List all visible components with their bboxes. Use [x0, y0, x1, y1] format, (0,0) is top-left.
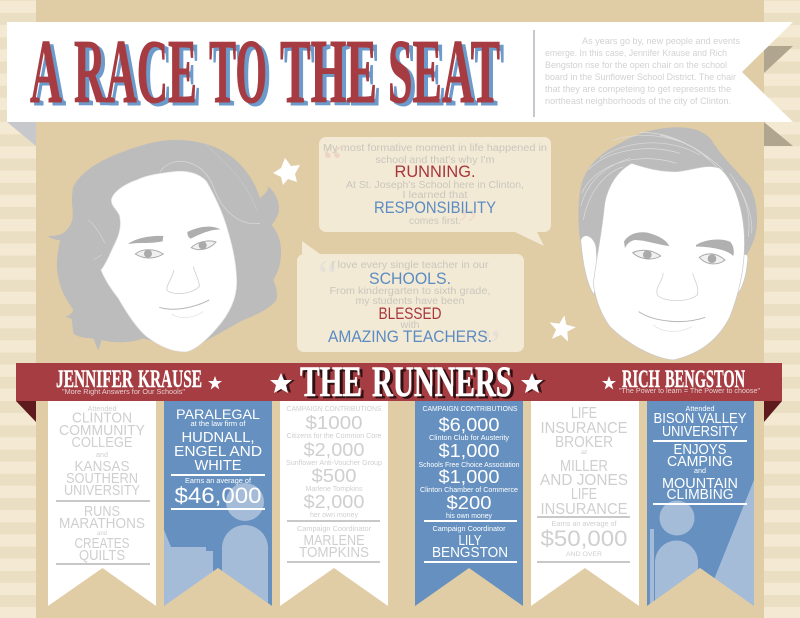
title: RACE — [74, 21, 197, 122]
column 3: Krause campaign contributions: Campaign Coordinator — [297, 526, 372, 533]
column 3: Krause campaign contributions: $1000 — [306, 412, 362, 433]
column 2: Krause occupation: HUDNALL, — [182, 429, 254, 446]
speech bubble: Krause quote: RESPONSIBILITY — [374, 198, 496, 217]
column 6: Bengston education and hobbies: CAMPING — [667, 454, 733, 470]
speech bubble: Krause quote: ” — [458, 200, 478, 249]
column 5: Bengston occupation: INSURANCE — [540, 420, 628, 437]
speech bubble: Krause quote — [319, 137, 551, 249]
column 6: Bengston education and hobbies — [647, 401, 754, 618]
column 2: Krause occupation: PARALEGAL — [176, 406, 260, 422]
column 3: Krause campaign contributions: $500 — [312, 465, 356, 486]
speech bubble: Bengston quote: AMAZING TEACHERS. — [328, 327, 492, 346]
heading: The Runners: THE — [303, 361, 365, 408]
column 2: Krause occupation: at the law firm of — [190, 421, 246, 428]
column 1: Krause education — [48, 401, 156, 606]
column 6: Bengston education and hobbies: CLIMBING — [666, 487, 734, 503]
heading: The Runners: RUNNERS — [375, 361, 515, 408]
column 5: Bengston occupation: AND OVER — [566, 551, 602, 558]
intro text block: emerge. In this case, Jennifer Krause and Rich — [545, 48, 727, 59]
infographic: SEAT — [392, 24, 504, 125]
column 4: Bengston campaign contributions: Clinton Club for Austerity — [429, 435, 510, 442]
title: THE — [280, 21, 377, 122]
column 1: Krause education: and — [97, 531, 107, 537]
icon: climber silhouette — [647, 480, 754, 618]
speech bubble: Krause quote: “ — [323, 137, 343, 186]
intro text block: that they are competeing to get represents the — [545, 84, 731, 95]
portrait: Rich Bengston — [578, 127, 757, 360]
column 5: Bengston occupation: LIFE — [571, 486, 597, 503]
column 6: Bengston education and hobbies: and — [694, 468, 706, 475]
column 4: Bengston campaign contributions: CAMPAIGN CONTRIBUTIONS — [422, 406, 518, 413]
title: RACE — [78, 24, 201, 125]
column 3: Krause campaign contributions: $2,000 — [304, 491, 364, 512]
name: Jennifer Krause with slogan: "More Right Answers for Our Schools" — [62, 389, 186, 396]
intro text block: northeast neighborhoods of the city of Clinton. — [545, 96, 731, 107]
column 2: Krause occupation: Earns an average of — [185, 478, 251, 485]
name: Jennifer Krause with slogan: KRAUSE — [138, 366, 202, 393]
column 4: Bengston campaign contributions: BENGSTON — [432, 545, 508, 561]
star — [273, 158, 300, 185]
column 1: Krause education: CREATES — [74, 536, 130, 552]
title: TO — [213, 24, 271, 125]
column 6: Bengston education and hobbies: MOUNTAIN — [662, 476, 738, 492]
column 4: Bengston campaign contributions: $1,000 — [438, 440, 500, 461]
column 5: Bengston occupation: INSURANCE — [540, 501, 628, 518]
column 4: Bengston campaign contributions — [415, 401, 523, 606]
column 5: Bengston occupation: LIFE — [571, 405, 597, 422]
speech bubble: Bengston quote: BLESSED — [378, 304, 442, 323]
column 6: Bengston education and hobbies: ENJOYS — [674, 442, 726, 458]
column 3: Krause campaign contributions — [280, 401, 388, 606]
heading: The Runners: RUNNERS — [372, 359, 512, 406]
speech bubble: Krause quote: At St. Joseph's School here in Clinton, — [346, 179, 524, 191]
column 1: Krause education: SOUTHERN — [66, 471, 138, 487]
column 5: Bengston occupation — [531, 401, 639, 606]
intro text block: board in the Sunflower School District. The chair — [545, 72, 736, 83]
runners ribbon — [16, 363, 782, 422]
title banner — [7, 22, 793, 146]
title — [30, 21, 504, 125]
speech bubble: Bengston quote: with — [399, 319, 420, 331]
column 1: Krause education: CLINTON — [72, 410, 132, 426]
column 4: Bengston campaign contributions: $1,000 — [438, 466, 500, 487]
name: Rich Bengston with slogan: BENGSTON — [665, 366, 745, 393]
name: Rich Bengston with slogan: RICH — [622, 366, 660, 393]
title: TO — [209, 21, 267, 122]
speech bubble: Bengston quote: my students have been — [356, 295, 465, 307]
column 3: Krause campaign contributions: Marlene Tompkins — [306, 486, 363, 493]
portrait: Jennifer Krause — [48, 140, 281, 352]
title: A — [34, 24, 66, 125]
intro text block — [545, 36, 740, 107]
speech bubble: Bengston quote: SCHOOLS. — [369, 269, 451, 288]
speech bubble: Krause quote: My most formative moment in life happened in — [323, 142, 547, 154]
column 5: Bengston occupation: $50,000 — [540, 526, 628, 551]
star — [550, 315, 576, 342]
column 3: Krause campaign contributions: CAMPAIGN CONTRIBUTIONS — [286, 406, 382, 413]
column 5: Bengston occupation: BROKER — [555, 434, 613, 451]
speech bubble: Krause quote: school and that's why I'm — [376, 154, 495, 166]
column 1: Krause education: QUILTS — [79, 548, 125, 564]
column 1: Krause education: COMMUNITY — [59, 423, 145, 439]
speech bubble: Krause quote: RUNNING. — [394, 162, 476, 181]
name: Rich Bengston with slogan — [602, 366, 761, 395]
column 5: Bengston occupation: AND JONES — [540, 472, 628, 489]
column 3: Krause campaign contributions: TOMPKINS — [299, 545, 369, 561]
speech bubble: Bengston quote: ” — [481, 321, 501, 370]
column 1: Krause education: and — [96, 452, 108, 459]
column 4: Bengston campaign contributions: LILY — [458, 533, 482, 549]
speech bubble: Krause quote: I learned that — [402, 189, 468, 201]
column 5: Bengston occupation: at — [581, 450, 587, 456]
speech bubble: Bengston quote — [297, 241, 524, 370]
column 2: Krause occupation: WHITE — [194, 457, 242, 474]
column 6: Bengston education and hobbies: Attended — [686, 406, 715, 413]
column 4: Bengston campaign contributions: his own money — [446, 513, 492, 520]
heading: The Runners: THE — [300, 359, 362, 406]
column 5: Bengston occupation: MILLER — [560, 458, 608, 475]
speech bubble: Bengston quote: “ — [318, 251, 338, 300]
column 1: Krause education: KANSAS — [74, 459, 130, 475]
intro text block: Bengston rise for the open chair on the school — [545, 60, 727, 71]
column 4: Bengston campaign contributions: Schools Free Choice Association — [418, 462, 520, 469]
column 4: Bengston campaign contributions: $6,000 — [438, 414, 500, 435]
column 4: Bengston campaign contributions: Clinton Chamber of Commerce — [420, 487, 518, 494]
title: SEAT — [388, 21, 500, 122]
column 2: Krause occupation: $46,000 — [174, 483, 262, 508]
column 3: Krause campaign contributions: $2,000 — [304, 439, 364, 460]
column 1: Krause education: RUNS — [84, 504, 120, 520]
speech bubble: Bengston quote: From kindergarten to sixth grade, — [330, 285, 490, 297]
name: Rich Bengston with slogan: "The Power to learn = The Power to choose" — [619, 388, 761, 395]
column 5: Bengston occupation: Earns an average of — [552, 521, 617, 528]
title: A — [30, 21, 62, 122]
column 4: Bengston campaign contributions: $200 — [446, 492, 492, 513]
name: Jennifer Krause with slogan — [56, 366, 222, 396]
heading: The Runners — [270, 359, 546, 408]
speech bubble: Krause quote: comes first. — [409, 215, 461, 227]
column 1: Krause education: UNIVERSITY — [64, 483, 140, 499]
icon: office worker silhouette — [164, 483, 272, 618]
column 2: Krause occupation: ENGEL AND — [174, 443, 262, 460]
column 6: Bengston education and hobbies: BISON VALLEY — [654, 411, 747, 427]
intro text block: As years go by, new people and events — [582, 36, 740, 47]
title: THE — [284, 24, 381, 125]
column 3: Krause campaign contributions: Citizens for the Common Core — [286, 433, 382, 440]
column 1: Krause education: MARATHONS — [59, 516, 145, 532]
speech bubble: Bengston quote: I love every single teacher in our — [332, 259, 489, 271]
column 3: Krause campaign contributions: MARLENE — [304, 533, 365, 549]
column 1: Krause education: COLLEGE — [72, 435, 133, 451]
name: Jennifer Krause with slogan: JENNIFER — [56, 366, 134, 393]
column 4: Bengston campaign contributions: Campaign Coordinator — [432, 526, 506, 533]
column 6: Bengston education and hobbies: UNIVERSITY — [662, 424, 738, 440]
column 3: Krause campaign contributions: Sunflower Anti-Voucher Group — [286, 460, 382, 467]
column 3: Krause campaign contributions: her own money — [310, 512, 359, 519]
column 1: Krause education: Attended — [88, 406, 117, 413]
column 2: Krause occupation — [164, 401, 272, 618]
